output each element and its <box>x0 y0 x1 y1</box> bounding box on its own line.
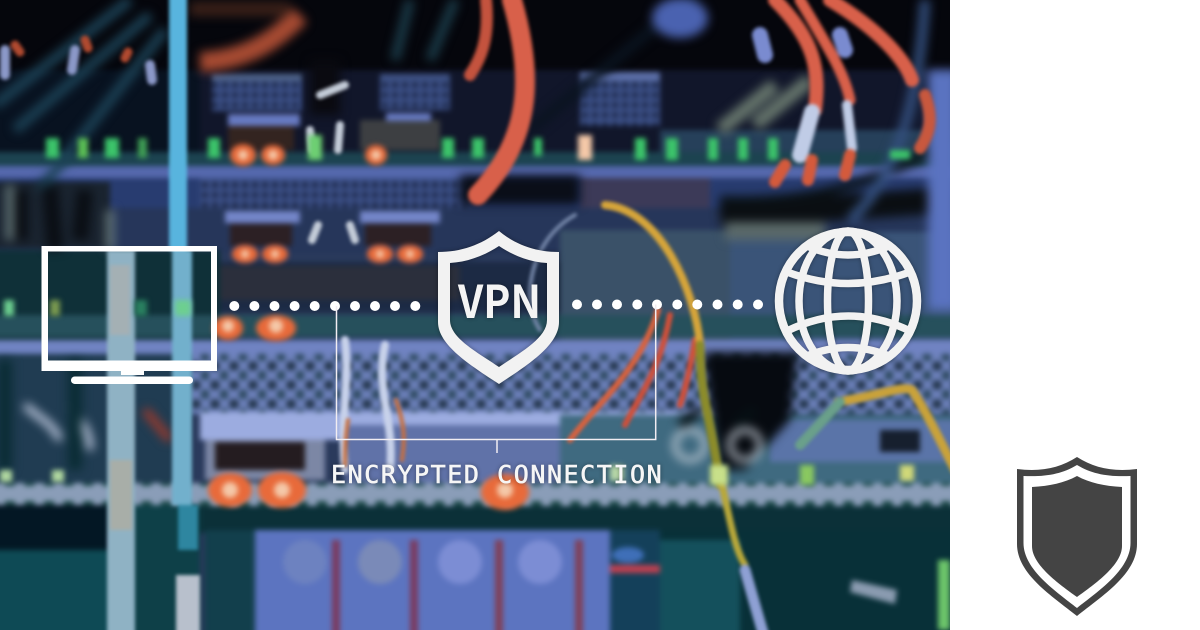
dotted link: VPN to globe <box>572 300 763 310</box>
icon: monitor <box>42 246 217 384</box>
bracket linking dotted paths to label <box>336 304 656 453</box>
VPN label: VPN <box>457 266 541 331</box>
LED status lights <box>0 135 950 630</box>
icon: VPN shield <box>438 231 559 384</box>
dotted link: monitor to VPN <box>229 301 420 311</box>
vertical cable strips <box>107 0 200 630</box>
label: encrypted connection: ENCRYPTED CONNECTION <box>331 460 663 489</box>
icon: globe <box>779 231 917 371</box>
dark cables and shadows <box>0 0 960 470</box>
icon: grey shield logo <box>1017 457 1137 616</box>
orange fibre cables <box>5 0 955 630</box>
